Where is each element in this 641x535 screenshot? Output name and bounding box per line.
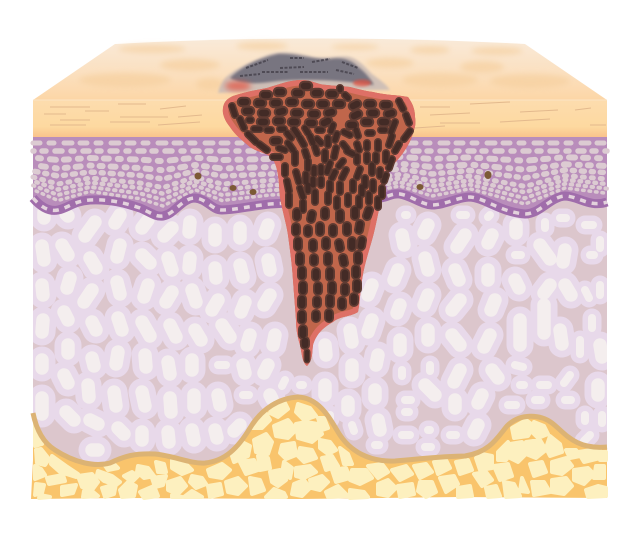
- crust red spots: [225, 81, 251, 91]
- skin cross-section illustration: [30, 38, 610, 500]
- upper skin band (stratum corneum): [33, 100, 607, 138]
- epidermis purple layer: [33, 137, 607, 216]
- fat cells: [35, 401, 606, 498]
- top surface of the skin: [33, 38, 607, 100]
- dermis-fat boundary: [33, 397, 607, 464]
- surface cell patches: [79, 42, 570, 90]
- tumour cells: [232, 86, 410, 360]
- fat layer (hypodermis): [31, 392, 607, 499]
- dermis cells: [42, 212, 602, 450]
- epidermis cell rows: [33, 143, 607, 206]
- crust texture: [240, 58, 358, 76]
- dermis with cells: [33, 190, 607, 464]
- tumour mass: [223, 80, 415, 366]
- surface crust over tumour: [218, 52, 390, 93]
- basal layer of the epidermis: [33, 194, 607, 216]
- band texture lines: [44, 102, 606, 128]
- pigment spots in epidermis: [194, 171, 492, 195]
